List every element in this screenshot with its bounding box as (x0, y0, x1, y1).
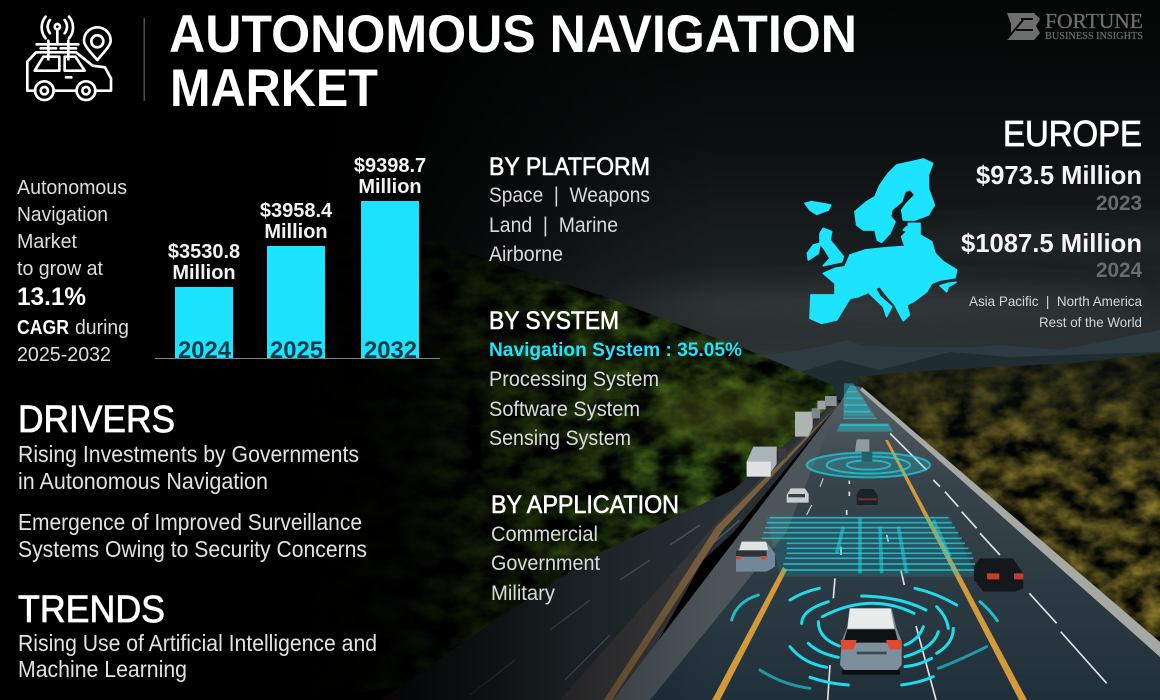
bar chart: market size (155, 155, 440, 364)
panel: by application: Government (491, 552, 600, 575)
bar 2032 (354, 155, 426, 364)
panel: trends: Machine Learning (18, 656, 187, 682)
panel: by system: Navigation System : 35.05% (489, 340, 742, 361)
panel: by system: BY SYSTEM (489, 307, 619, 335)
header divider (144, 18, 145, 101)
panel: Europe figures: EUROPE (1003, 113, 1142, 154)
panel: trends: TRENDS (18, 589, 165, 631)
panel: by system: Processing System (489, 368, 659, 391)
panel: by system: Sensing System (489, 427, 631, 450)
panel: drivers: DRIVERS (18, 399, 175, 441)
background: highway scene (382, 40, 1160, 700)
panel: by platform (489, 153, 650, 266)
growth text block: 13.1% (17, 283, 86, 311)
panel: by application: BY APPLICATION (491, 491, 679, 519)
panel: drivers (18, 399, 367, 562)
panel: trends: Rising Use of Artificial Intelligence and (18, 630, 377, 656)
bar 2025 (260, 200, 333, 364)
panel: Europe figures: Rest of the World (1039, 314, 1142, 330)
bar 2024 (168, 241, 240, 364)
growth text block: to grow at (17, 258, 103, 280)
title: MARKET (170, 59, 378, 118)
panel: Europe figures: 2023 (1096, 192, 1142, 215)
icon: connected car with location pin (27, 17, 111, 100)
title: AUTONOMOUS NAVIGATION (169, 5, 857, 64)
panel: by application: Commercial (491, 523, 598, 546)
growth text block: Navigation (17, 204, 108, 226)
bar 2032: $9398.7 (354, 155, 426, 177)
logo: Fortune Business Insights (1007, 9, 1143, 42)
bar 2025: 2025 (270, 337, 323, 364)
panel: drivers: Rising Investments by Governments (18, 441, 359, 467)
panel: by application: Military (491, 582, 555, 605)
bar 2032: Million (358, 176, 422, 198)
bar 2025: Million (264, 221, 328, 243)
panel: drivers: Emergence of Improved Surveillance (18, 509, 362, 535)
panel: by platform: Space | Weapons (489, 184, 650, 207)
bar 2025: $3958.4 (260, 200, 333, 222)
panel: by platform: Airborne (489, 243, 563, 266)
Cars (736, 396, 1023, 675)
panel: by platform: Land | Marine (489, 214, 618, 237)
growth text block: CAGR (17, 317, 69, 339)
growth text block: Market (17, 231, 77, 253)
bar 2032: 2032 (364, 337, 417, 364)
panel: Europe figures (961, 113, 1142, 330)
growth text block: during (75, 317, 129, 339)
title (169, 5, 857, 118)
map: Europe (805, 159, 957, 323)
panel: Europe figures: $1087.5 Million (961, 228, 1142, 258)
growth text block: 2025-2032 (17, 344, 111, 366)
Sensor graphics (762, 392, 977, 577)
panel: by system (489, 307, 742, 450)
growth text block (17, 177, 129, 366)
panel: by system: Software System (489, 398, 640, 421)
bar 2024: $3530.8 (168, 241, 240, 263)
logo: Fortune Business Insights: BUSINESS INSIGHTS (1045, 31, 1143, 42)
panel: Europe figures: 2024 (1096, 259, 1142, 282)
logo: Fortune Business Insights: FORTUNE (1045, 9, 1143, 33)
panel: Europe figures: Asia Pacific | North America (969, 293, 1142, 309)
bar 2024: 2024 (178, 337, 232, 364)
panel: by application (491, 491, 679, 605)
panel: by platform: BY PLATFORM (489, 153, 650, 181)
panel: Europe figures: $973.5 Million (976, 160, 1142, 190)
panel: drivers: in Autonomous Navigation (18, 468, 268, 494)
panel: trends (18, 589, 377, 682)
panel: drivers: Systems Owing to Security Concerns (18, 536, 367, 562)
growth text block: Autonomous (17, 177, 127, 199)
bar 2024: Million (172, 262, 236, 284)
